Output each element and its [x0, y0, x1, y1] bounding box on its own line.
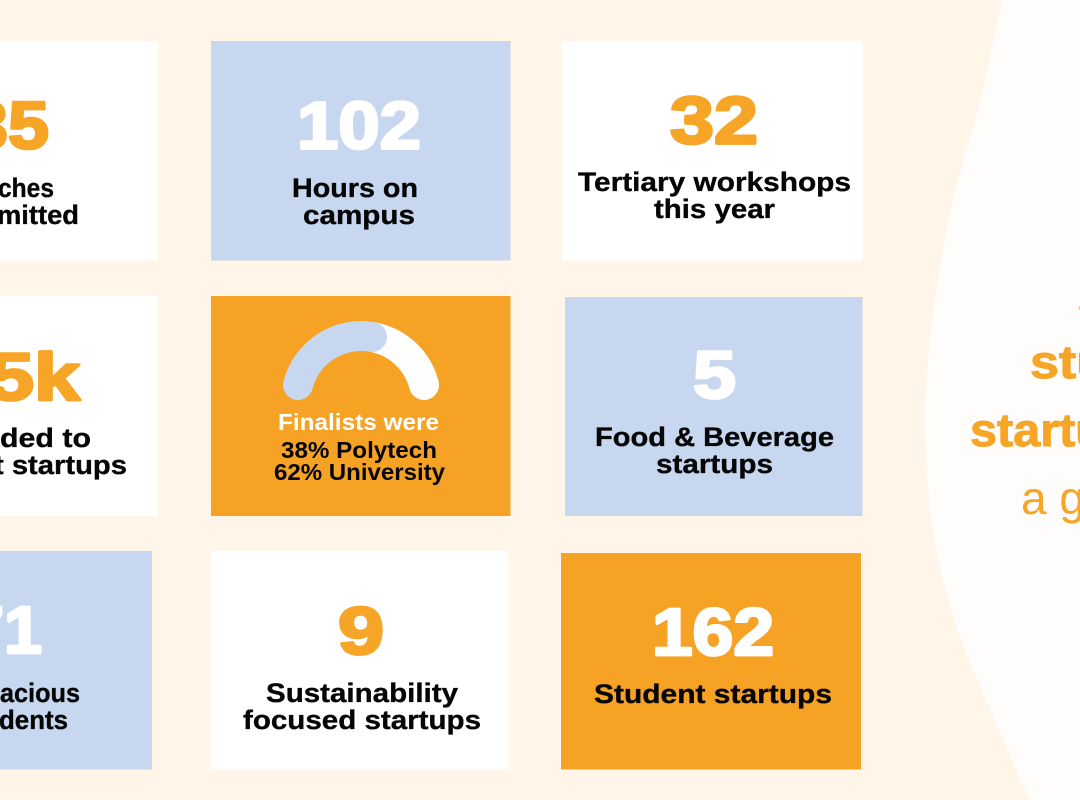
number: 9: 9 — [338, 594, 384, 669]
label: funded to startups — [0, 423, 127, 480]
label: tenacious students: dents — [0, 705, 68, 735]
panel: tertiary workshops — [562, 41, 862, 260]
label: food and beverage startups: Food & Beverage — [595, 422, 834, 452]
panel: sustainability — [211, 551, 508, 770]
panel: food and beverage — [565, 297, 862, 516]
label: hours on campus: campus — [303, 200, 415, 230]
label: hours on campus — [292, 173, 418, 230]
label: tertiary workshops — [578, 167, 851, 224]
label: sustainability focused startups: Sustainability — [266, 678, 458, 708]
label: hours on campus: Hours on — [292, 173, 418, 203]
label: sustainability focused startups — [243, 678, 481, 735]
panel: pitches submitted — [0, 41, 158, 260]
panel: tenacious students — [0, 551, 152, 770]
label: tenacious students — [0, 678, 80, 735]
label: pitches submitted — [0, 173, 79, 230]
label: polytech and university shares — [274, 437, 445, 485]
label: food and beverage startups — [595, 422, 834, 479]
label: tertiary workshops: this year — [654, 194, 776, 224]
label: student startups: Student startups — [594, 679, 832, 709]
panel: student startups — [561, 553, 861, 770]
right side panel — [925, 0, 1080, 800]
label: food and beverage startups: startups — [656, 449, 773, 479]
panel: finalists — [211, 296, 510, 516]
gauge chart — [298, 336, 424, 385]
headline text — [970, 271, 1080, 524]
label: funded to startups: ded to — [0, 423, 91, 453]
panel: hours on campus — [211, 41, 510, 260]
number: 32: 32 — [670, 84, 758, 158]
label: sustainability focused startups: focused startups — [243, 705, 481, 735]
label: polytech and university shares: 62% University — [274, 459, 445, 485]
label: tertiary workshops: Tertiary workshops — [578, 167, 851, 197]
number: 102: 102 — [297, 88, 421, 164]
number: 5: 5 — [693, 338, 736, 413]
label: polytech and university shares: 38% Polytech — [281, 437, 437, 463]
label: finalists were: Finalists were — [278, 409, 439, 435]
panel: funding to startups — [0, 296, 158, 516]
label: tenacious students: acious — [0, 678, 80, 708]
number: 162: 162 — [652, 595, 774, 670]
